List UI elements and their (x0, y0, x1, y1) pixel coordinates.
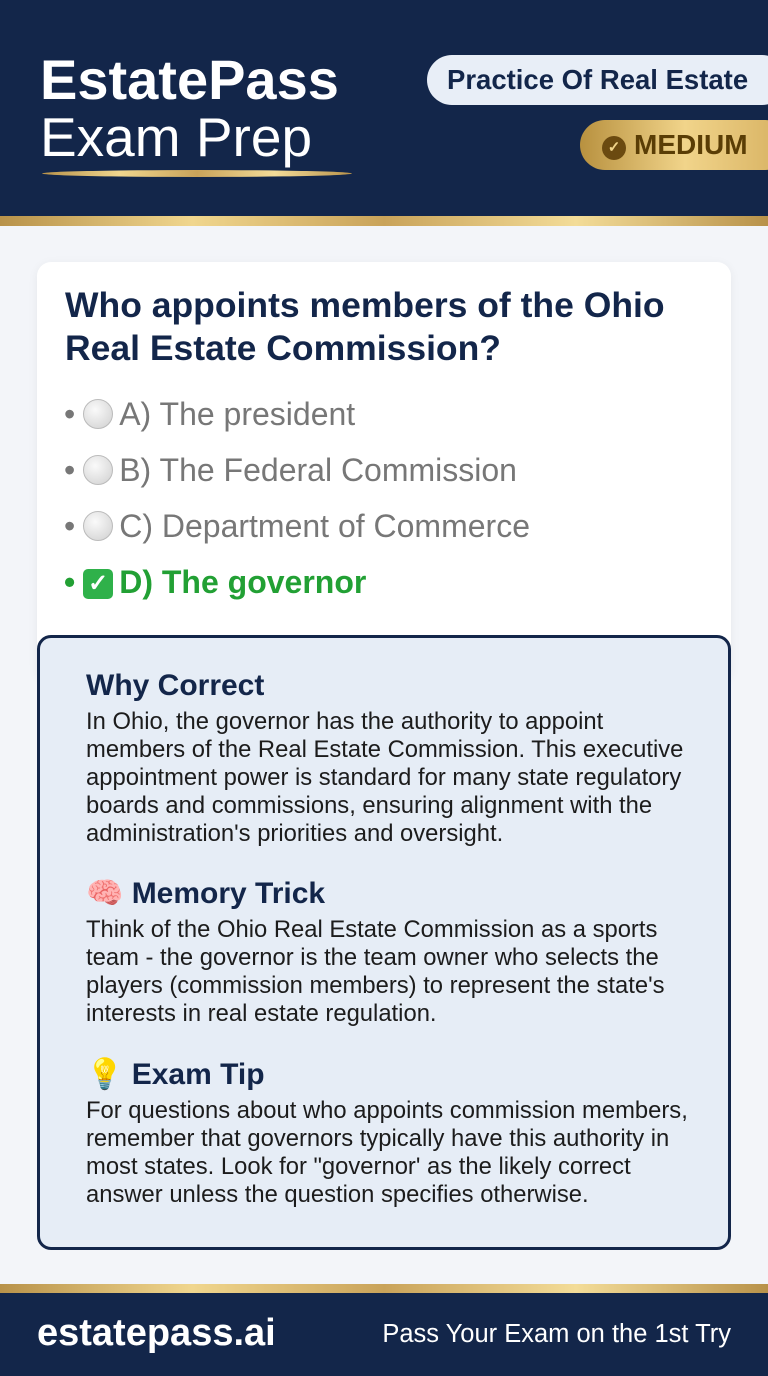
option D correct: • D) The governor (64, 564, 366, 600)
question: Real Estate Commission? (65, 328, 501, 368)
option B: • B) The Federal Commission (64, 452, 517, 488)
memory trick (86, 877, 665, 1027)
why correct: members of the Real Estate Commission. This executive (86, 736, 683, 763)
exam tip: answer unless the question specifies otherwise. (86, 1181, 589, 1208)
why correct: Why Correct (86, 669, 264, 702)
exam tip: remember that governors typically have this authority in (86, 1125, 669, 1152)
memory trick: interests in real estate regulation. (86, 1000, 437, 1027)
exam tip: For questions about who appoints commission members, (86, 1097, 688, 1124)
memory trick: team - the governor is the team owner who selects the (86, 944, 659, 971)
logo title: Exam Prep (40, 106, 312, 168)
difficulty badge: MEDIUM (634, 129, 748, 160)
option D correct: ✓ (88, 570, 108, 597)
why correct: boards and commissions, ensuring alignment with the (86, 792, 652, 819)
options (64, 396, 530, 600)
why correct: In Ohio, the governor has the authority to appoint (86, 708, 603, 735)
why correct (86, 669, 683, 847)
option C: • C) Department of Commerce (64, 508, 530, 544)
category pill (427, 55, 768, 105)
memory trick: players (commission members) to represent the state's (86, 972, 665, 999)
header (0, 0, 768, 216)
exam tip: most states. Look for "governor' as the likely correct (86, 1153, 631, 1180)
memory trick: Think of the Ohio Real Estate Commission as a sports (86, 916, 657, 943)
question card (37, 262, 731, 682)
footer url: estatepass.ai (37, 1312, 276, 1354)
footer (0, 1293, 768, 1376)
exam tip (86, 1057, 688, 1208)
memory trick: 🧠 Memory Trick (86, 877, 325, 910)
why correct: appointment power is standard for many state regulatory (86, 764, 681, 791)
difficulty badge (580, 120, 768, 170)
footer tagline: Pass Your Exam on the 1st Try (382, 1320, 731, 1348)
logo title: EstatePass (40, 48, 339, 111)
logo title (40, 48, 339, 168)
difficulty badge: ✓ (608, 139, 620, 156)
category pill: Practice Of Real Estate (447, 64, 748, 95)
why correct: administration's priorities and oversight. (86, 820, 503, 847)
gold swoosh (42, 170, 352, 177)
option A: • A) The president (64, 396, 355, 432)
exam tip: 💡 Exam Tip (86, 1058, 265, 1091)
question (65, 285, 665, 368)
explanation box (37, 635, 731, 1250)
question: Who appoints members of the Ohio (65, 285, 665, 325)
